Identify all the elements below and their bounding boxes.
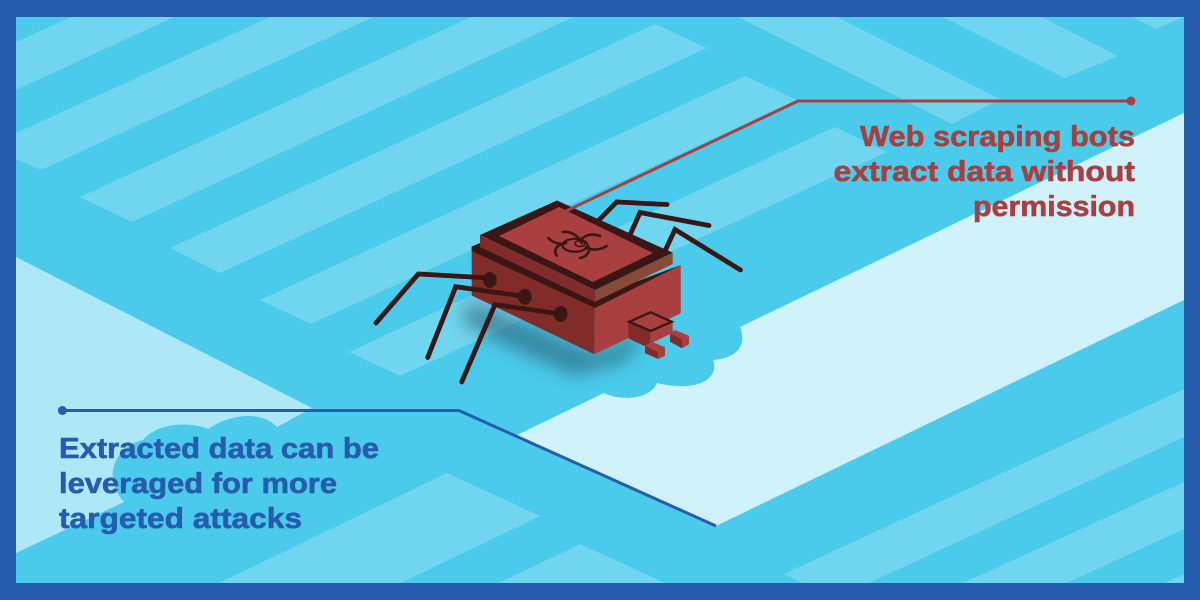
- icon: biohazard: [548, 232, 607, 258]
- bug shadow: [462, 300, 650, 376]
- lid right side: [595, 253, 673, 302]
- tail cube: [628, 312, 673, 349]
- leg joints: [483, 272, 568, 322]
- small foot cube left: [645, 342, 665, 359]
- far legs: [598, 202, 740, 270]
- callout text: blue: leveraged for more: [59, 468, 337, 500]
- callout text: red: extract data without: [834, 156, 1136, 188]
- callout line: red: [566, 96, 1136, 211]
- body left face: [472, 247, 595, 354]
- lid left side: [480, 235, 595, 302]
- callout text: blue: Extracted data can be: [59, 433, 379, 465]
- lid red top: [499, 207, 653, 282]
- near legs: [376, 274, 561, 382]
- lid dark frame: [480, 200, 673, 290]
- left light tile with cloud edge: [16, 257, 312, 553]
- small foot cube right: [670, 330, 689, 348]
- callout text: blue: [59, 433, 379, 535]
- callout text: blue: targeted attacks: [59, 503, 302, 535]
- body right face: [594, 265, 681, 354]
- spider bot: [376, 200, 740, 382]
- callout text: red: permission: [973, 191, 1135, 223]
- callout text: red: Web scraping bots: [860, 121, 1135, 153]
- callout text: red: [834, 121, 1136, 223]
- dark band under lid: [472, 243, 681, 308]
- right light tile with cloud edge: [517, 113, 1184, 526]
- callout line: blue: [58, 406, 716, 526]
